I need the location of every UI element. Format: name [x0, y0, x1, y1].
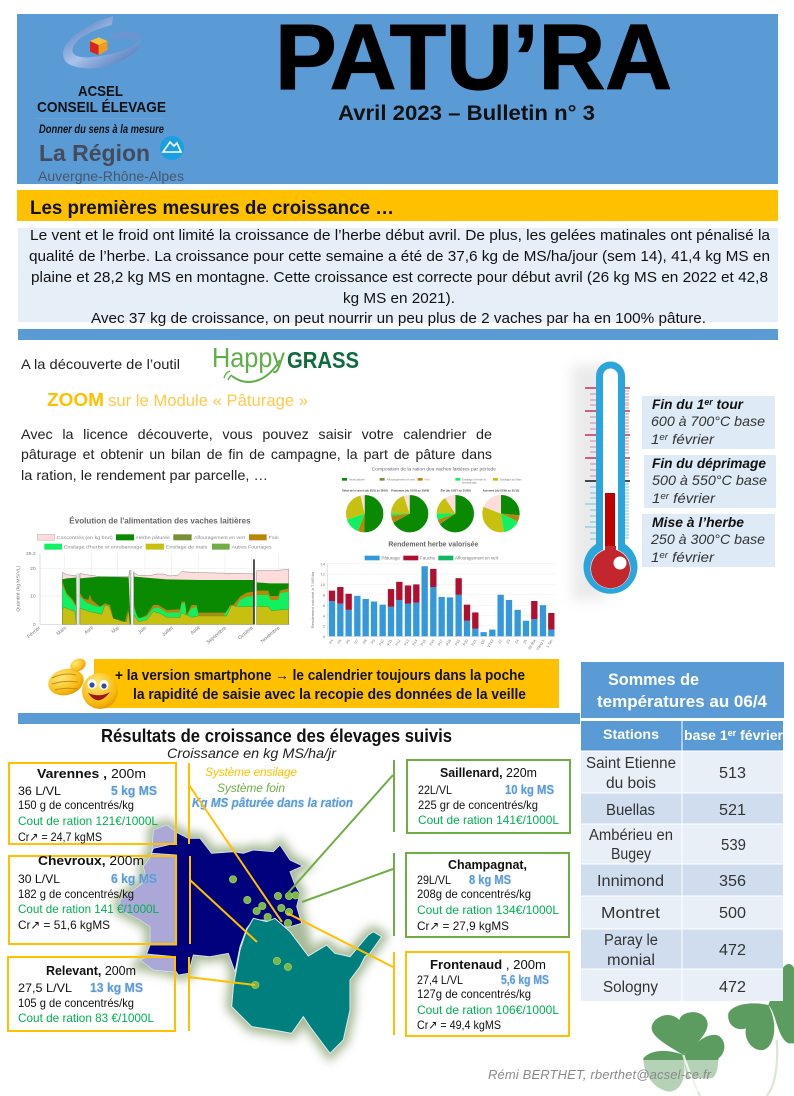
chart legend: Herbe pâturée: [136, 535, 170, 541]
farm card: Saillenard: [407, 760, 570, 833]
temperature stage: fin du déprimage: 1: [652, 490, 660, 506]
table rows: 539: [721, 837, 746, 854]
area chart: alimentation: 0: [33, 622, 36, 628]
temperature stage: mise à l'herbe: 1: [651, 549, 659, 565]
lavender area: [120, 825, 177, 945]
description paragraph: [21, 426, 492, 483]
temperature stage: fin du 1er tour: er: [704, 397, 713, 407]
pie charts: composition: Début de la saison (du 01/01 au 30/04): [342, 490, 388, 493]
bar chart: rendement herbe: P18: [445, 639, 452, 646]
connector lines: [188, 760, 394, 1035]
table rows: Montret: [601, 905, 661, 922]
bar chart: rendement herbe: 14: [321, 561, 326, 566]
table rows: Stations: [603, 726, 659, 742]
logo: La Région Auvergne-Rhône-Alpes: La Région: [39, 140, 150, 166]
farm card: Saillenard: 225 gr de concentrés/kg: [418, 798, 538, 812]
bar chart: rendement herbe: 6: [323, 603, 326, 608]
bar chart: rendement herbe: P10: [378, 639, 385, 646]
table rows: Buellas: [606, 802, 655, 819]
section heading: premières mesures: Les premières mesures de croissance …: [30, 198, 394, 219]
stacked areas: [62, 559, 289, 624]
bar chart: rendement herbe: P16: [429, 639, 436, 646]
map of the region: [120, 825, 382, 1053]
table rows: 513: [719, 765, 746, 782]
table rows: er: [728, 728, 737, 738]
map legend: Système ensilage: [205, 765, 297, 779]
table rows: 500: [719, 905, 746, 922]
farm card: Champagnat: 208g de concentrés/kg: [417, 887, 531, 901]
temperature stage: mise à l'herbe: février: [668, 549, 715, 565]
bar chart: rendement herbe: VT13: [487, 639, 495, 648]
temperature table: [581, 662, 784, 1001]
farm card: Saillenard: 22L/VL: [418, 783, 452, 797]
farm card: Frontenaud: [406, 952, 569, 1036]
scale ticks: [585, 388, 630, 539]
pie charts: composition: Automne (du 01/09 au 31/12): [483, 490, 519, 493]
bar chart: rendement herbe: Rendement valorisé à T MS/ha: [310, 571, 315, 628]
smartphone banner: + la version smartphone → le calendrier toujours dans la poche: [115, 668, 525, 684]
clover decoration: [480, 964, 794, 1096]
subtitle: Avril 2023 – Bulletin n° 3: [338, 102, 595, 125]
temperature stage: fin du 1er tour: Fin du 1: [652, 396, 706, 412]
chart legend: Concentrés (en kg brut): [57, 535, 113, 541]
smartphone banner: [45, 656, 559, 709]
pie 1: [355, 504, 374, 523]
bar chart: rendement herbe: 1 Tan: [546, 639, 554, 649]
area chart: alimentation: Juillet: [161, 625, 175, 638]
bar chart: rendement herbe: P6: [345, 639, 351, 645]
farm card: Varennes: 5 kg MS: [111, 783, 157, 798]
temperature stage: fin du 1er tour: février: [668, 431, 715, 447]
bar chart: rendement herbe: Rendement herbe valorisée: [388, 542, 478, 549]
temperature stage: fin du déprimage: 500 à 550°C base: [652, 472, 767, 488]
temperature stage: mise à l'herbe: Mise à l’herbe: [652, 514, 744, 530]
logo: La Région Auvergne-Rhône-Alpes: [38, 136, 184, 184]
pie 2: [400, 504, 419, 523]
area chart: alimentation: Quantité (kg MS/VL): [15, 565, 21, 612]
description paragraph: pâturage et obtenir un bilan de fin de campagne, la part de pâture dans: [21, 446, 492, 462]
intro text block: Le vent et le froid ont limité la croissance de l’herbe début avril. De plus, les gelées matinales ont pénalisé la: [30, 227, 771, 244]
bar chart: rendement herbe: P7: [354, 639, 360, 645]
logo: ACSEL Conseil Élevage: ACSEL: [78, 83, 123, 100]
table rows: Sologny: [603, 979, 658, 996]
table rows: Innimond: [597, 873, 664, 890]
smartphone banner: la rapidité de saisie avec la recopie des données de la veille: [133, 687, 526, 703]
farm card: Champagnat: Champagnat,: [448, 857, 527, 872]
table rows: Ambérieu en: [589, 827, 673, 844]
area chart: alimentation: Mai: [111, 625, 121, 635]
farm card: Varennes: 150 g de concentrés/kg: [18, 798, 134, 812]
pie 4: [492, 504, 510, 523]
farm card: Saillenard: 10 kg MS: [505, 782, 554, 797]
pie legend: enrubannage: [462, 480, 477, 484]
farm card: Frontenaud: 127g de concentrés/kg: [417, 987, 531, 1001]
map legend: Kg MS pâturée dans la ration: [192, 796, 353, 810]
temperature stage: fin du 1er tour: [642, 396, 775, 449]
farm card: Relevant: 27,5 L/VL: [18, 981, 72, 995]
bar legend: Affouragement en vert: [455, 556, 499, 561]
farm card: Varennes: Cout de ration 121€/1000L: [18, 814, 158, 828]
bar chart: rendement herbe: P11: [387, 639, 393, 646]
farm card: Relevant: Relevant, 200m: [46, 963, 136, 978]
farm card: Relevant: 13 kg MS: [90, 980, 143, 995]
area chart: alimentation: Août: [190, 625, 202, 636]
intro text block: qualité de l’herbe. La croissance pour cette semaine a été de 37,6 kg de MS/ha/jour (sem 14), 41,4 kg MS en: [29, 248, 770, 265]
bar chart: rendement herbe: P14: [412, 639, 419, 646]
farm card: Frontenaud: 27,4 L/VL: [417, 973, 463, 987]
pie legend: Ensilage d'herbe et: [462, 477, 486, 481]
bar chart: rendement herbe: Z2: [497, 639, 503, 645]
bar legend: Pâturage: [381, 556, 400, 561]
zoom heading: ZOOM: [47, 390, 104, 410]
section heading: premières mesures: [17, 190, 778, 221]
bar chart: rendement herbe: Z4: [514, 639, 520, 645]
bar chart: rendement herbe: P20: [462, 639, 469, 646]
table rows: monial: [607, 952, 655, 969]
farm card: Champagnat: 8 kg MS: [469, 873, 511, 887]
logo: HappyGrass: [212, 342, 359, 382]
farm card: Saillenard: Cout de ration 141€/1000L: [418, 813, 559, 827]
logo: HappyGrass: Happy: [212, 342, 285, 373]
chart legend: Affouragement en vert: [194, 535, 246, 541]
thermometer bulb: [591, 546, 630, 588]
results heading: Croissance en kg MS/ha/jr: [167, 745, 337, 761]
map legend: [192, 765, 353, 810]
intro text block: plaine et 28,2 kg MS en montagne. Cette croissance est correcte pour début avril (26 kg MS en 2022 et 42,8: [31, 269, 768, 286]
bar chart: rendement herbe: 10: [321, 582, 326, 587]
temperature stage: fin du 1er tour: er: [659, 432, 669, 442]
table rows: 472: [719, 979, 746, 996]
HappyGrass intro: A la découverte de l’outil: [21, 356, 180, 372]
temperature stage: fin du déprimage: Fin du déprimage: [652, 455, 766, 471]
bar chart: rendement herbe: P12: [395, 639, 402, 646]
bar chart: rendement herbe: P17: [437, 639, 444, 646]
table rows: Bugey: [611, 846, 651, 863]
zoom heading: sur le Module « Pâturage »: [108, 391, 308, 410]
area chart: alimentation: Juin: [137, 625, 148, 636]
bar chart: rendement herbe: Z5: [523, 639, 528, 645]
icon: thumbs-up smiley: [45, 656, 118, 709]
farm card: Champagnat: Cr↗ = 27,9 kgMS: [417, 919, 509, 933]
chart legend: Autres Fourrages: [232, 544, 272, 550]
bar chart: rendement herbe: Z3: [506, 639, 511, 645]
table title: Sommes de: [608, 671, 699, 689]
temperature stage: mise à l'herbe: er: [659, 550, 669, 560]
farm card: Chevroux: 182 g de concentrés/kg: [18, 887, 134, 901]
area chart: alimentation: Évolution de l'alimentation des vaches laitières: [69, 516, 251, 525]
bar chart: rendement herbe: P8: [362, 639, 368, 645]
intro text block: kg MS en 2021).: [343, 290, 455, 307]
farm card: Varennes: Cr↗ = 24,7 kgMS: [18, 830, 102, 844]
farm card: Champagnat: [406, 853, 569, 937]
area chart: alimentation: Septembre: [205, 625, 228, 646]
bar chart: rendement herbe: 28 dha: [527, 638, 537, 651]
temperature stage: fin du 1er tour: 1: [651, 431, 659, 447]
bar chart: rendement herbe: P13: [403, 639, 410, 646]
pie charts: composition: [342, 466, 522, 523]
pie legend: Affouragement en vert: [387, 478, 415, 482]
farm card: Saillenard: Saillenard, 220m: [440, 765, 537, 780]
temperature stage: fin du déprimage: er: [660, 491, 670, 501]
bar chart: rendement herbe: Q2: [480, 639, 486, 645]
bar chart: rendement herbe: 8: [323, 592, 326, 597]
area chart: alimentation: 10: [30, 594, 36, 600]
farm card: Champagnat: 29L/VL: [417, 873, 451, 887]
chart legend: [37, 534, 279, 550]
pie 3: [446, 504, 465, 523]
results heading: Résultats de croissance des élevages suivis: [101, 726, 452, 746]
farm card: Varennes: Varennes , 200m: [37, 766, 146, 781]
table rows: février: [736, 727, 784, 743]
bar chart: rendement herbe: P9: [370, 639, 376, 645]
pie charts: composition: Composition de la ration des vaches laitières par période: [372, 466, 496, 471]
farm card: Frontenaud: Frontenaud , 200m: [430, 957, 546, 972]
intro text block: [18, 227, 778, 327]
table rows: 521: [719, 802, 746, 819]
chart legend: Foin: [269, 535, 279, 541]
pie charts: composition: Printemps (du 01/03 au 30/06): [391, 490, 430, 493]
bar chart: rendement herbe: P19: [454, 639, 461, 646]
map legend: Système foin: [217, 781, 285, 795]
temperature stage: mise à l'herbe: [642, 514, 775, 567]
pie legend: Herbe pâturée: [349, 478, 365, 482]
bar chart: rendement herbe: P15: [420, 639, 427, 646]
logo: ACSEL Conseil Élevage: Donner du sens à la mesure: [39, 122, 164, 136]
bars: pâturage: [329, 566, 554, 636]
bar chart: rendement herbe: [310, 542, 555, 651]
farm card: Champagnat: Cout de ration 134€/1000L: [417, 903, 559, 917]
description paragraph: Avec la licence découverte, vous pouvez saisir votre calendrier de: [21, 426, 492, 442]
HappyGrass intro: [21, 342, 359, 382]
area chart: alimentation: Avril: [83, 625, 95, 636]
bar chart: rendement herbe: P21: [471, 639, 478, 646]
area chart: alimentation: [15, 516, 290, 646]
bars: fauche: [329, 569, 554, 630]
table rows: Saint Etienne: [586, 755, 676, 772]
results heading: [101, 726, 452, 761]
table rows: 472: [719, 942, 746, 959]
farm card: Chevroux: Cout de ration 141 €/1000L: [18, 902, 159, 916]
chart legend: Ensilage d'herbe et enrubannage: [64, 544, 143, 550]
teal area: [232, 918, 382, 1053]
area chart: alimentation: Mars: [56, 625, 68, 637]
area chart: alimentation: 20: [30, 566, 36, 572]
chart legend: Ensilage de maïs: [166, 544, 208, 550]
farm location dots: [229, 876, 299, 989]
bar chart: rendement herbe: 12: [321, 572, 326, 577]
farm card: Relevant: [8, 957, 175, 1031]
farm card: Frontenaud: Cr↗ = 49,4 kgMS: [417, 1018, 501, 1032]
farm card: Varennes: 36 L/VL: [18, 784, 61, 798]
navy area: [147, 832, 303, 975]
temperature stage: fin du déprimage: février: [669, 490, 716, 506]
bar legend: [365, 556, 499, 561]
title: PATU’RA: [275, 5, 672, 109]
table title: [581, 662, 784, 718]
temperature stage: mise à l'herbe: 250 à 300°C base: [650, 531, 765, 547]
farm card: Chevroux: 6 kg MS: [111, 871, 157, 886]
pie legend: Ensilage de Maïs: [500, 478, 522, 482]
farm card: Relevant: Cout de ration 83 €/1000L: [18, 1011, 154, 1025]
description paragraph: la ration, le rendement par parcelle, …: [21, 467, 268, 483]
header banner: [17, 5, 778, 184]
pie legend: Foin: [425, 478, 430, 482]
bar chart: rendement herbe: 4: [323, 613, 326, 618]
logo: HappyGrass: GRASS: [287, 347, 359, 373]
pie legend: [342, 477, 522, 484]
area chart: alimentation: Novembre: [260, 625, 281, 645]
bar chart: rendement herbe: P4: [328, 639, 334, 645]
table rows: 356: [719, 873, 746, 890]
temperature stage: fin du déprimage: [644, 455, 776, 508]
area chart: alimentation: Février: [26, 625, 42, 640]
farm card: Frontenaud: Cout de ration 106€/1000L: [417, 1003, 559, 1017]
bar chart: rendement herbe: 2: [323, 624, 326, 629]
farm card: Chevroux: [9, 853, 176, 944]
bar chart: rendement herbe: Pang 1: [536, 639, 545, 651]
bar chart: rendement herbe: 0: [323, 634, 326, 639]
farm card: Varennes: [9, 763, 176, 844]
farm card: Chevroux: Cr↗ = 51,6 kgMS: [18, 918, 110, 932]
temperature stage: fin du 1er tour: tour: [713, 396, 745, 412]
farm card: Frontenaud: 5,6 kg MS: [501, 973, 549, 987]
area chart: alimentation: Octobre: [237, 625, 255, 641]
thermometer: [572, 362, 638, 600]
table title: températures au 06/4: [597, 693, 768, 711]
table rows: [581, 721, 784, 1001]
farm card: Relevant: 105 g de concentrés/kg: [18, 996, 134, 1010]
bar chart: rendement herbe: P5: [337, 639, 343, 645]
table rows: du bois: [606, 775, 656, 792]
area chart: alimentation: 25.2: [26, 551, 36, 557]
table rows: Paray le: [604, 932, 658, 949]
farm card: Chevroux: 30 L/VL: [18, 872, 60, 886]
table rows: base 1: [684, 727, 728, 743]
bar legend: Fauche: [420, 556, 435, 561]
logo: ACSEL Conseil Élevage: CONSEIL ÉLEVAGE: [37, 99, 166, 116]
footer author: Rémi BERTHET, rberthet@acsel-ce.fr: [488, 1067, 712, 1082]
logo: ACSEL Conseil Élevage: [37, 16, 166, 136]
temperature stage: fin du 1er tour: 600 à 700°C base: [651, 413, 765, 429]
farm card: Chevroux: Chevroux, 200m: [38, 853, 144, 868]
logo: La Région Auvergne-Rhône-Alpes: Auvergne-Rhône-Alpes: [38, 168, 184, 184]
pie charts: composition: Été (du 01/07 au 31/08): [441, 490, 471, 493]
intro text block: Avec 37 kg de croissance, on peut nourrir un peu plus de 2 vaches par ha en 100% pâture.: [91, 310, 706, 327]
